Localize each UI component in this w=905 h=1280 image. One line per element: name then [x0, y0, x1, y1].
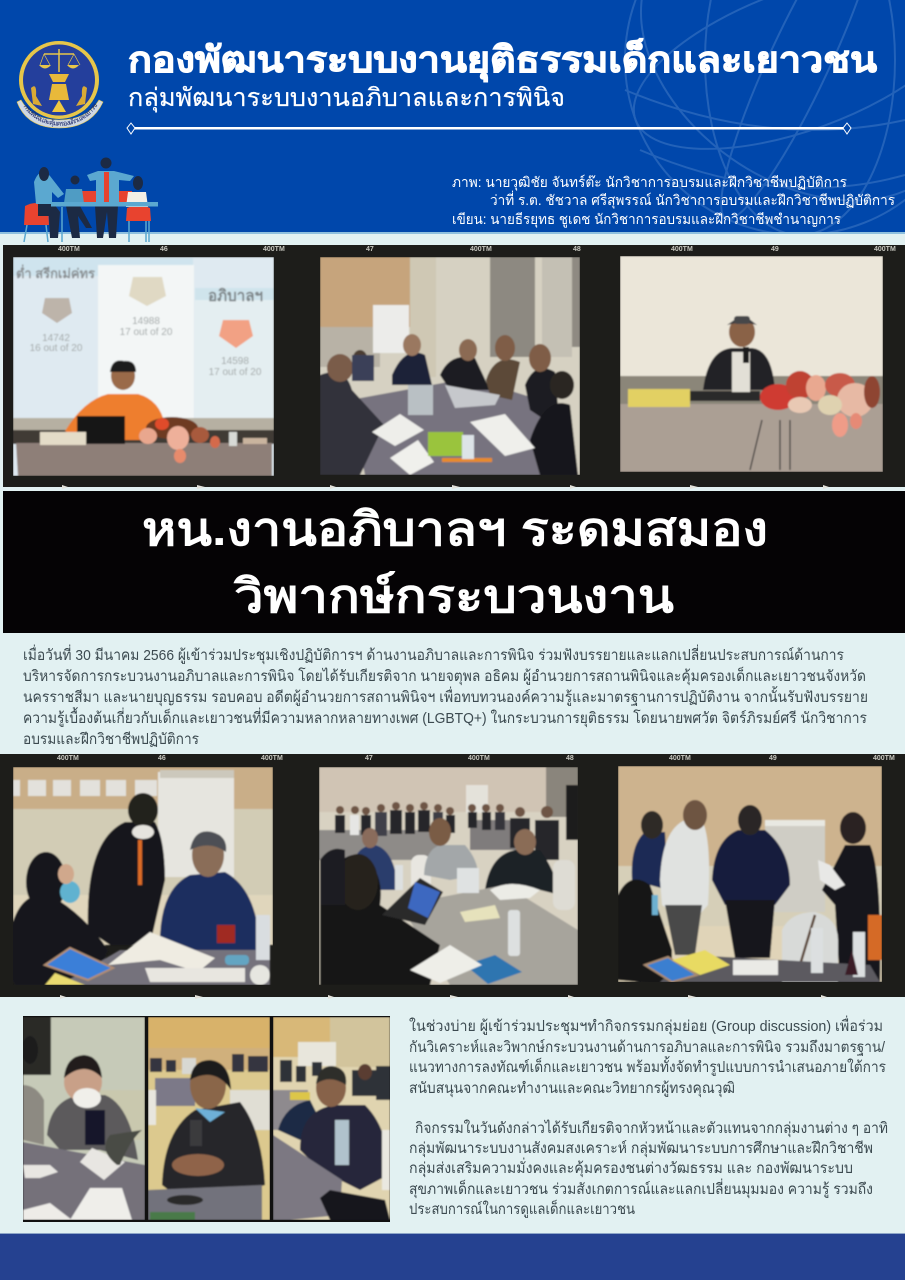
film strip: middle row: 49 — [769, 755, 777, 762]
photo: standing group at flip chart — [618, 766, 882, 985]
icon: people meeting around table — [24, 158, 158, 242]
film strip: middle row: 400TM — [57, 755, 79, 762]
subtitle: กลุ่มพัฒนาระบบงานอภิบาลและการพินิจ — [128, 84, 565, 113]
headline banner: หน.งานอภิบาลฯ ระดมสมอง — [142, 503, 768, 555]
film strip: top row: 400TM — [58, 246, 80, 253]
footer band — [0, 1233, 905, 1280]
photo: participants reviewing documents — [12, 767, 273, 985]
credits: เขียน: นายธีรยุทธ ชูเดช นักวิชาการอบรมและฝึกวิชาชีพชำนาญการ — [452, 211, 841, 228]
logo: department emblem — [16, 41, 104, 128]
photo: speaker in orange with ranking slide: ต่ำ สรีกเม่ค่ทร — [16, 264, 95, 281]
photo: woman reading document — [22, 1017, 145, 1220]
film strip: top row: 49 — [771, 246, 779, 253]
photo: speaker in orange with ranking slide: 14988 — [132, 316, 160, 327]
credits — [452, 174, 895, 228]
film strip: middle row: 47 — [365, 755, 373, 762]
photo: man speaking into microphone — [148, 1017, 270, 1220]
film strip: top row: 48 — [573, 246, 581, 253]
paragraph: event summary: อบรมและฝึกวิชาชีพปฏิบัติการ — [23, 731, 199, 748]
headline banner — [3, 491, 905, 633]
photo: large room with tables of participants — [319, 767, 578, 985]
paragraph: event summary: เมื่อวันที่ 30 มีนาคม 2566 ผู้เข้าร่วมประชุมเชิงปฏิบัติการฯ ด้านงานอภิบาลและการพินิจ ร่วมฟังบรรยายและแลกเปลี่ยนประสบการณ์ด้านการ — [23, 644, 844, 665]
film strip: top row: 400TM — [470, 246, 492, 253]
title: กองพัฒนาระบบงานยุติธรรมเด็กและเยาวชน — [128, 37, 877, 83]
film strip: middle row: 400TM — [669, 755, 691, 762]
photo: speaker in orange with ranking slide: 17 out of 20 — [120, 327, 173, 338]
paragraph: attending units: ประสบการณ์ในการดูแลเด็กและเยาวชน — [409, 1199, 635, 1218]
film strip: top row: 47 — [366, 246, 374, 253]
credits: ว่าที่ ร.ต. ชัชวาล ศรีสุพรรณ์ นักวิชาการอบรมและฝึกวิชาชีพปฏิบัติการ — [490, 191, 895, 209]
film strip: middle row: 400TM — [468, 755, 490, 762]
film strip: middle row: 46 — [158, 755, 166, 762]
bottom photo collage — [22, 1016, 390, 1222]
photo: seated man in navy jacket — [273, 1017, 390, 1220]
photo: speaker in orange with ranking slide: 17 out of 20 — [209, 367, 262, 378]
film strip: top row: 400TM — [671, 246, 693, 253]
header band — [0, 0, 905, 259]
film strip: middle row: 400TM — [261, 755, 283, 762]
film strip: top row: 400TM — [263, 246, 285, 253]
photo: speaker in orange with ranking slide: 14742 — [42, 333, 70, 344]
photo: speaker in orange with ranking slide: อภิบาลฯ — [208, 287, 263, 305]
paragraph: attending units: กลุ่มส่งเสริมความมั่งคงและคุ้มครองชนต่างวัฒธรรม และ กองพัฒนาระบบ — [409, 1157, 853, 1178]
paragraph: attending units — [409, 1119, 888, 1218]
photo: speaker in orange with ranking slide: 16 out of 20 — [30, 343, 83, 354]
film strip: top row: 46 — [160, 246, 168, 253]
film strip: middle row — [0, 754, 905, 999]
headline banner: วิพากษ์กระบวนงาน — [233, 570, 675, 622]
film strip: top row: 400TM — [874, 246, 896, 253]
paragraph: attending units: กลุ่มพัฒนาระบบงานสังคมสงเคราะห์ กลุ่มพัฒนาระบบการศึกษาและฝึกวิชาชีพ — [409, 1140, 873, 1158]
film strip: top row — [3, 245, 905, 489]
photo: guest speaker with hat and flowers — [620, 256, 883, 472]
photo: speaker in orange with ranking slide: 14598 — [221, 356, 249, 367]
photo: group discussion around table — [320, 257, 580, 475]
film strip: middle row: 400TM — [873, 755, 895, 762]
paragraph: group discussion: ในช่วงบ่าย ผู้เข้าร่วมประชุมฯทำกิจกรรมกลุ่มย่อย (Group discussion) เพื่อร่วม — [409, 1015, 883, 1036]
paragraph: group discussion — [409, 1015, 886, 1098]
paragraph: event summary — [23, 644, 868, 748]
paragraph: attending units: สุขภาพเด็กและเยาวชน ร่วมสังเกตการณ์และแลกเปลี่ยนมุมมอง ความรู้ รวมถึง — [409, 1178, 873, 1199]
film strip: middle row: 48 — [566, 755, 574, 762]
photo: speaker in orange with ranking slide — [13, 257, 274, 476]
credits: ภาพ: นายวุฒิชัย จันทร์ต๊ะ นักวิชาการอบรมและฝึกวิชาชีพปฏิบัติการ — [452, 174, 847, 191]
header divider line — [127, 123, 851, 134]
paragraph: group discussion: สนับสนุนจากคณะทำงานและคณะวิทยากรผู้ทรงคุณวุฒิ — [409, 1080, 735, 1098]
